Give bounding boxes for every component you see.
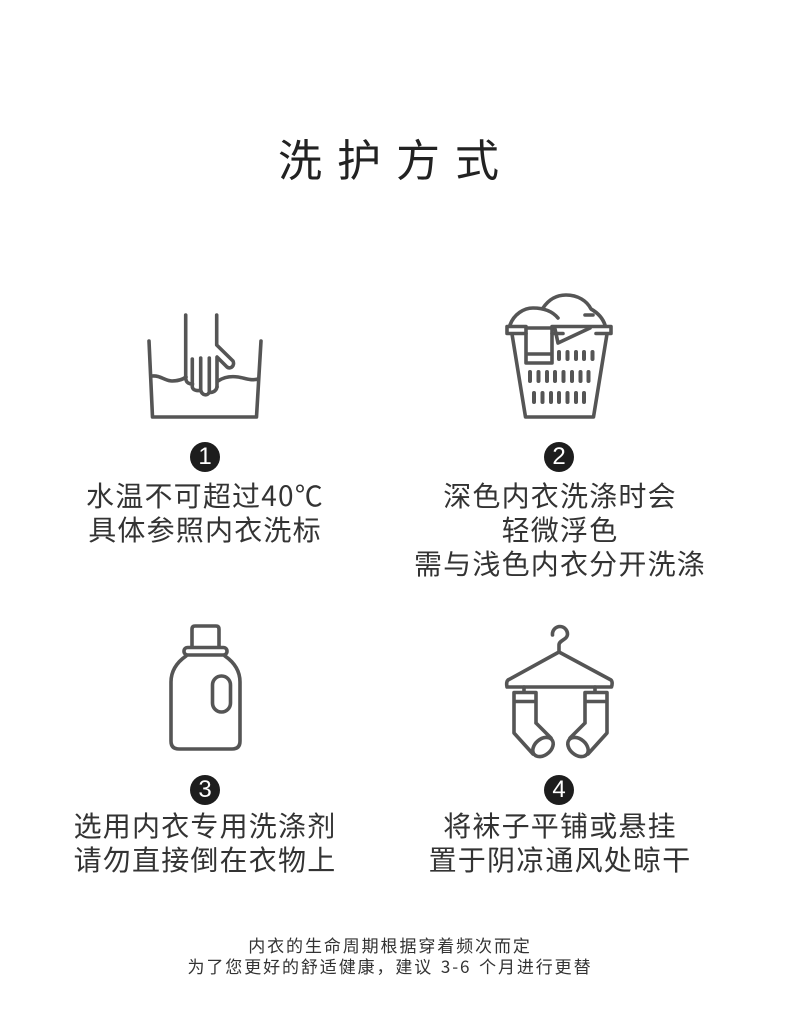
text: step 3: 请勿直接倒在衣物上 (74, 839, 336, 879)
text: step 3 (74, 805, 336, 879)
text: step 2 (414, 475, 706, 583)
icon: detergent bottle (169, 624, 242, 751)
footer note (188, 932, 592, 978)
footer note: 内衣的生命周期根据穿着频次而定 (248, 932, 532, 957)
text: step 2: 轻微浮色 (502, 509, 618, 549)
text: step 2: 需与浅色内衣分开洗涤 (414, 543, 706, 583)
number badge 3: 3 (198, 776, 212, 803)
number badge 2 (544, 442, 574, 472)
text: step 4: 置于阴凉通风处晾干 (429, 839, 691, 879)
number badge 2: 2 (552, 443, 566, 470)
text: step 1: 具体参照内衣洗标 (88, 509, 322, 549)
footer note: 为了您更好的舒适健康，建议 3-6 个月进行更替 (188, 953, 592, 978)
number badge 1 (190, 442, 220, 472)
icon: hanger with socks (504, 624, 614, 758)
text: step 4 (429, 805, 691, 879)
text: step 1: 水温不可超过40℃ (86, 475, 324, 515)
text: step 2: 深色内衣洗涤时会 (443, 475, 677, 515)
text: step 4: 将袜子平铺或悬挂 (443, 805, 677, 845)
title: 洗护方式 (278, 125, 514, 189)
icon: hand in water basin (147, 313, 263, 419)
number badge 3 (190, 775, 220, 805)
icon: laundry basket (505, 293, 613, 419)
number badge 1: 1 (198, 443, 212, 470)
text: step 3: 选用内衣专用洗涤剂 (74, 805, 336, 845)
number badge 4: 4 (552, 776, 566, 803)
text: step 1 (86, 475, 324, 549)
number badge 4 (544, 775, 574, 805)
